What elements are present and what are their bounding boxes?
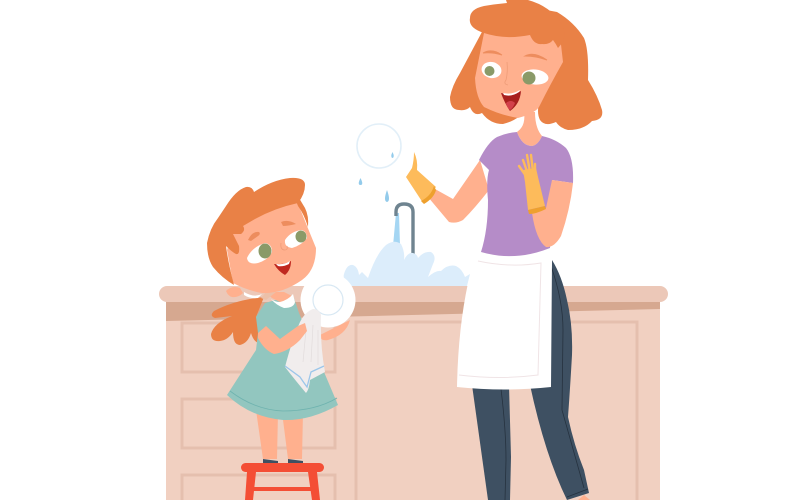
counter top xyxy=(159,286,668,302)
near leg xyxy=(530,260,589,500)
nose xyxy=(505,62,508,85)
hair back xyxy=(450,30,540,124)
soap bubble xyxy=(357,124,401,168)
faucet xyxy=(396,204,413,254)
eyes xyxy=(247,230,307,263)
legs xyxy=(256,410,303,459)
far leg xyxy=(472,385,511,500)
plate xyxy=(300,272,356,328)
neck xyxy=(517,112,542,146)
front arm xyxy=(258,323,307,354)
counter shadow band xyxy=(166,300,660,321)
right glove xyxy=(519,155,546,214)
shirt xyxy=(479,132,573,256)
trousers xyxy=(472,260,589,500)
towel xyxy=(285,309,325,393)
hair right side xyxy=(296,198,308,227)
cabinet door xyxy=(356,322,637,500)
mouth xyxy=(501,90,521,111)
water stream xyxy=(393,213,400,246)
eyes xyxy=(480,60,549,86)
foot xyxy=(578,495,590,500)
hair fringe xyxy=(470,0,564,48)
right arm xyxy=(532,180,573,247)
ear xyxy=(226,287,243,297)
face xyxy=(227,195,316,293)
soap bubble and drops xyxy=(357,124,401,202)
eyebrows xyxy=(483,51,547,60)
mother xyxy=(406,0,602,500)
soap foam xyxy=(344,242,470,286)
kitchen counter xyxy=(159,286,668,500)
cabinet body xyxy=(166,300,660,500)
sink with running water xyxy=(344,204,470,286)
shoes xyxy=(263,459,303,463)
face xyxy=(475,33,563,118)
nose xyxy=(281,243,287,250)
collar xyxy=(271,294,295,308)
ponytail xyxy=(211,297,264,345)
mouth xyxy=(274,261,291,275)
apron xyxy=(457,254,552,390)
stool xyxy=(241,463,324,500)
daughter xyxy=(207,178,356,500)
eyebrows xyxy=(248,221,296,241)
dress xyxy=(227,295,338,420)
left glove xyxy=(406,152,436,204)
left arm xyxy=(428,160,489,223)
neck and hair tie xyxy=(244,290,292,306)
hair xyxy=(207,178,305,285)
back hand under plate xyxy=(320,320,350,340)
drawer fronts xyxy=(182,323,335,500)
water drops xyxy=(359,152,394,202)
